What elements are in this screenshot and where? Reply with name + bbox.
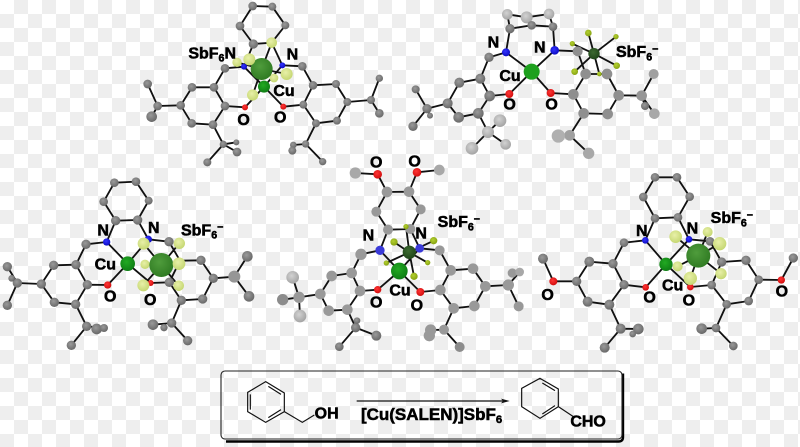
- molecule: bottom right complex with methoxy groups: N: [687, 220, 698, 237]
- molecule: centre complex with methoxy groups: SbF: [438, 214, 468, 231]
- molecule: centre complex with methoxy groups: Cu: [389, 282, 411, 299]
- molecule: centre complex with methoxy groups: O: [370, 155, 382, 172]
- molecule: bottom left complex: −: [217, 222, 223, 234]
- molecule: top right complex with puckered bridge: Cu: [499, 68, 521, 85]
- molecule: bottom right complex with methoxy groups: N: [636, 223, 648, 240]
- molecule: top right complex with puckered bridge: N: [534, 39, 546, 56]
- benzaldehyde structure: CHO: [570, 414, 606, 431]
- molecule: bottom left complex: SbF: [181, 222, 211, 239]
- reaction arrow with catalyst label: [Cu(SALEN)]SbF: [361, 405, 496, 424]
- molecule: centre complex with methoxy groups: −: [474, 213, 480, 225]
- molecule: bottom right complex with methoxy groups: SbF: [711, 210, 741, 227]
- molecule: top right complex with puckered bridge: [408, 9, 660, 159]
- molecule: bottom left complex: [3, 177, 254, 350]
- molecule: bottom left complex: O: [104, 289, 116, 306]
- molecule: bottom right complex with methoxy groups: −: [747, 209, 753, 221]
- molecule: bottom right complex with methoxy groups: Cu: [662, 278, 683, 295]
- molecule: top right complex with puckered bridge: N: [488, 35, 499, 52]
- benzyl alcohol structure: OH: [315, 405, 339, 422]
- molecule: top left complex with cyclohexyl bridge: N: [224, 45, 236, 62]
- molecule: top left complex with cyclohexyl bridge: O: [274, 109, 286, 126]
- molecule: bottom right complex with methoxy groups: O: [683, 293, 695, 310]
- molecule: centre complex with methoxy groups: O: [408, 153, 421, 170]
- molecule: bottom left complex: N: [148, 220, 160, 237]
- molecule: top left complex with cyclohexyl bridge: 6: [219, 53, 225, 65]
- molecule: top right complex with puckered bridge: O: [545, 97, 558, 114]
- molecule: top right complex with puckered bridge: −: [652, 43, 658, 55]
- molecule: bottom right complex with methoxy groups: O: [541, 287, 554, 304]
- molecule: bottom right complex with methoxy groups: O: [643, 290, 656, 307]
- molecule: bottom right complex with methoxy groups: O: [776, 284, 788, 301]
- molecule: centre complex with methoxy groups: O: [370, 295, 382, 312]
- molecule: centre complex with methoxy groups: N: [363, 228, 374, 245]
- molecule: top left complex with cyclohexyl bridge: [143, 2, 384, 166]
- molecule: top right complex with puckered bridge: SbF: [616, 44, 646, 61]
- molecule: centre complex with methoxy groups: N: [415, 226, 427, 243]
- molecule: top left complex with cyclohexyl bridge: N: [287, 46, 298, 63]
- molecule: bottom left complex: N: [97, 223, 109, 240]
- molecule: bottom left complex: 6: [211, 230, 217, 242]
- reaction arrow with catalyst label: 6: [496, 414, 502, 426]
- reaction arrow with catalyst label: [357, 399, 510, 426]
- molecule: bottom left complex: Cu: [95, 257, 116, 274]
- molecule: centre complex with methoxy groups: 6: [468, 221, 474, 233]
- molecule: bottom left complex: O: [144, 292, 156, 309]
- benzyl alcohol structure: [248, 382, 339, 422]
- molecule: top left complex with cyclohexyl bridge: Cu: [273, 83, 295, 100]
- benzaldehyde structure: [522, 378, 606, 431]
- molecule: bottom right complex with methoxy groups: [538, 173, 798, 353]
- molecule: bottom right complex with methoxy groups: 6: [741, 217, 747, 229]
- molecule: top left complex with cyclohexyl bridge: O: [237, 112, 250, 129]
- molecule: centre complex with methoxy groups: O: [411, 298, 423, 315]
- molecule: top right complex with puckered bridge: 6: [646, 51, 652, 63]
- panel: reaction scheme box: [221, 371, 623, 442]
- molecule: centre complex with methoxy groups: [277, 153, 524, 352]
- molecule: top left complex with cyclohexyl bridge: SbF: [188, 45, 219, 62]
- molecule: top right complex with puckered bridge: O: [503, 97, 516, 114]
